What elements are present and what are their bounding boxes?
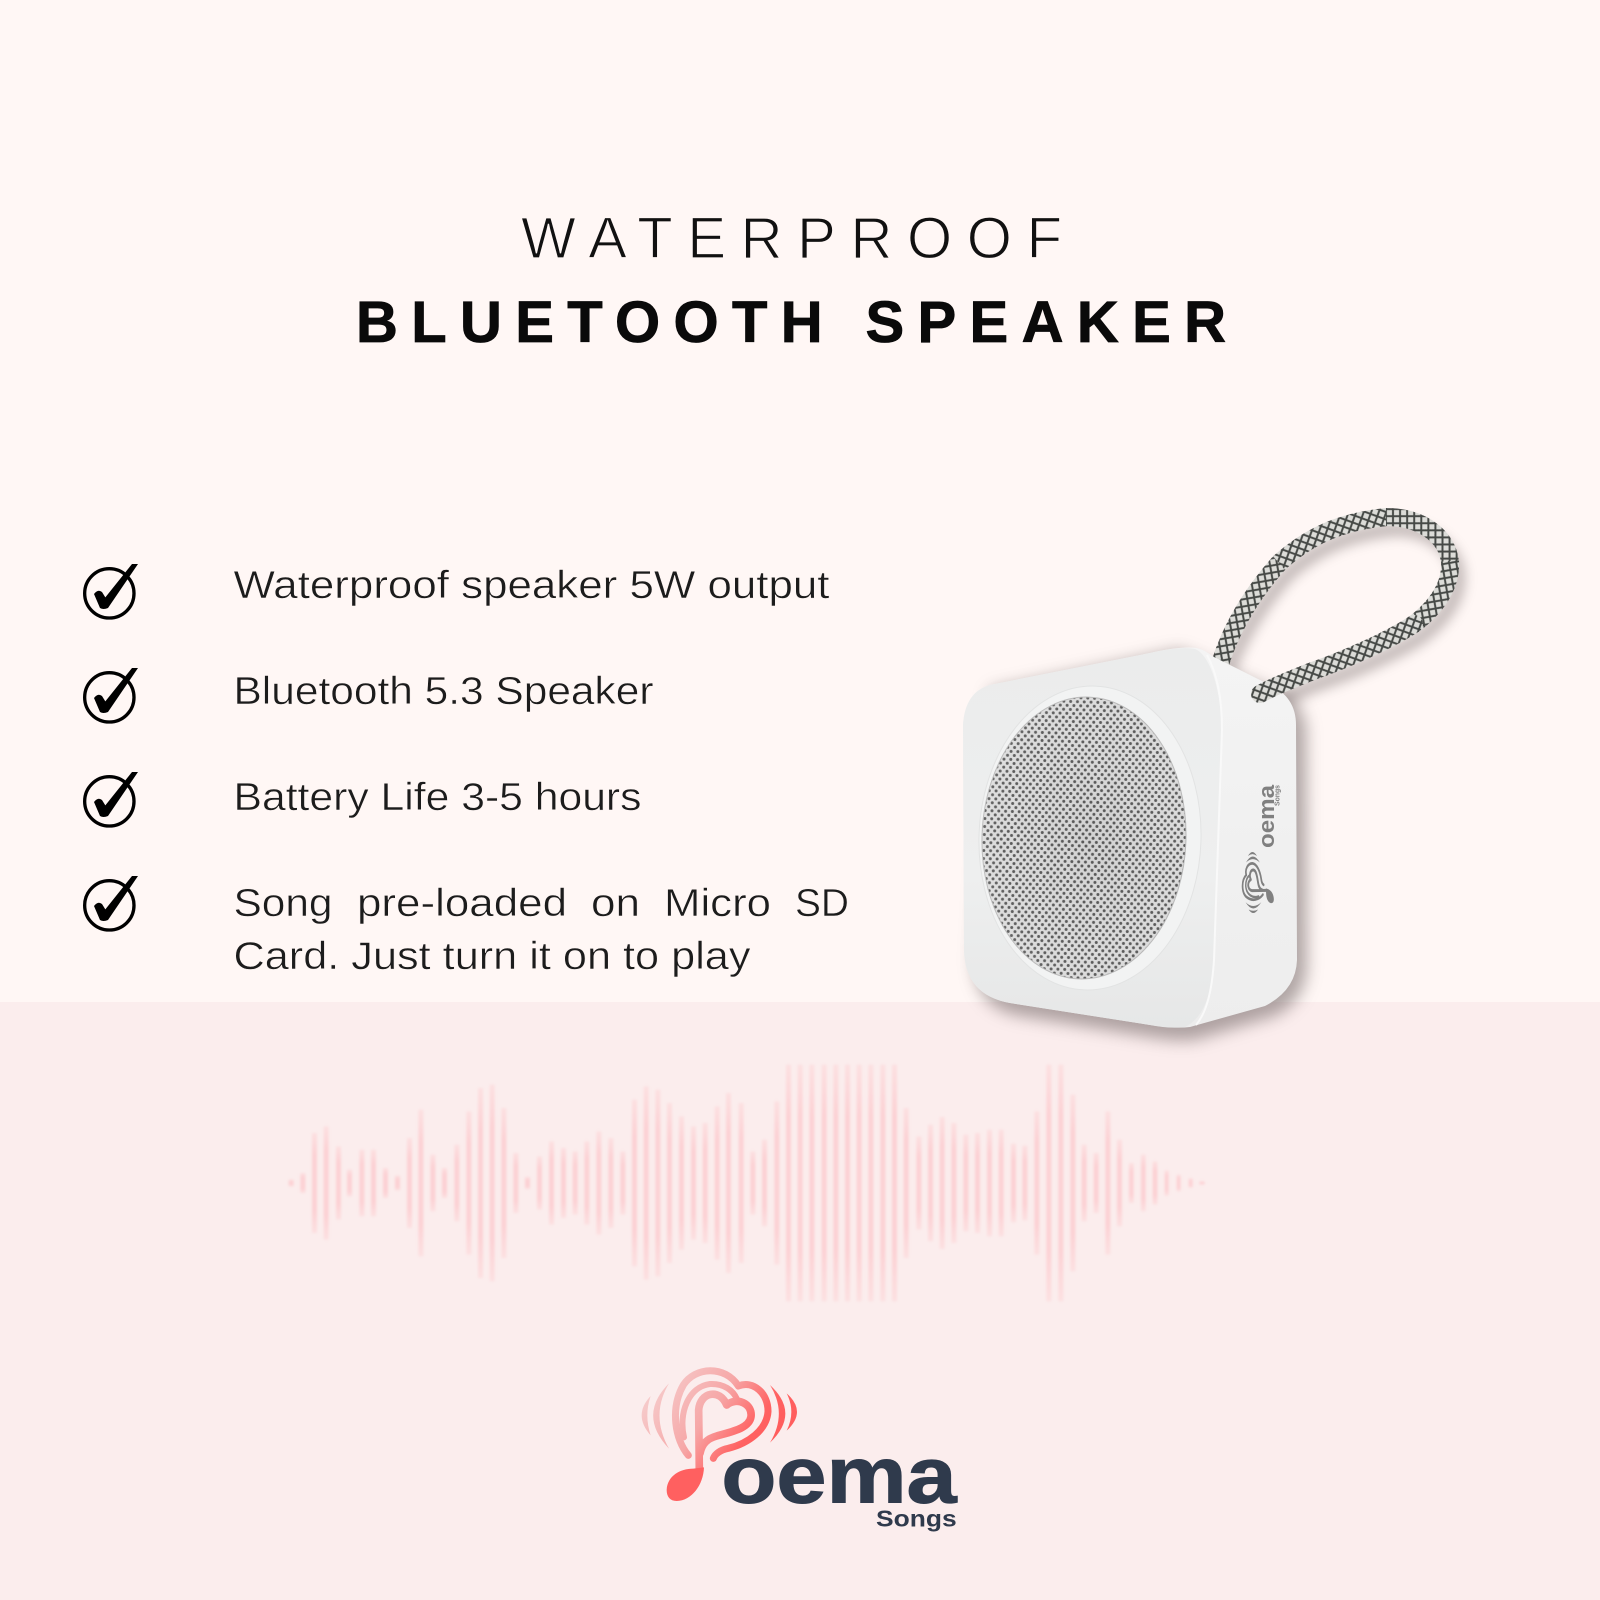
side logo songs: Songs	[1274, 785, 1282, 806]
title line: waterproof: WATERPROOF	[521, 206, 1062, 271]
feature text 2: Bluetooth 5.3 Speaker	[234, 670, 654, 713]
feature list	[85, 564, 849, 978]
logo	[642, 1371, 958, 1532]
logo mark	[642, 1371, 797, 1501]
feature text 4: pre-loaded	[357, 882, 567, 925]
feature text 4: on	[591, 882, 640, 925]
side logo mark	[1243, 852, 1274, 913]
speaker body	[963, 648, 1297, 1028]
feature row 4	[85, 876, 849, 978]
speaker shadow	[974, 650, 1307, 1041]
title	[356, 206, 1226, 355]
feature text 4: Song	[234, 882, 332, 925]
title line: bluetooth speaker: BLUETOOTH SPEAKER	[356, 290, 1226, 355]
waveform right half	[739, 1065, 1205, 1301]
feature text 4: Card. Just turn it on to play	[234, 935, 751, 978]
note head	[667, 1467, 704, 1501]
icon: check mark 3	[85, 772, 138, 826]
feature row 2	[85, 668, 654, 722]
logo word oema: oema	[721, 1430, 958, 1519]
speaker grille rim	[974, 682, 1206, 994]
speaker front face	[963, 648, 1222, 1028]
speaker side logo	[1243, 784, 1282, 913]
cord shadow	[1228, 529, 1458, 706]
heart and sound arcs	[675, 1371, 768, 1472]
background: lower panel	[0, 1002, 1600, 1600]
feature text 4: Micro	[664, 882, 771, 925]
sound waveform	[289, 1065, 1205, 1301]
side logo oema: oema	[1254, 784, 1279, 848]
feature text 1: Waterproof speaker 5W output	[234, 564, 830, 607]
feature text 4	[234, 882, 849, 978]
feature row 3	[85, 772, 641, 826]
icon: check mark 2	[85, 668, 138, 722]
icon: check mark 4	[85, 876, 138, 930]
speaker grille	[977, 694, 1191, 982]
feature text 3: Battery Life 3-5 hours	[234, 776, 642, 819]
feature text 4: SD	[795, 882, 849, 925]
logo word songs: Songs	[876, 1506, 957, 1532]
carrying cord	[1220, 517, 1450, 694]
background: upper panel	[0, 0, 1600, 1002]
speaker grille shading	[977, 694, 1191, 982]
speaker seam highlight	[1196, 655, 1222, 1025]
waveform left half	[289, 1085, 731, 1281]
sound waves	[642, 1383, 797, 1449]
feature row 1	[85, 564, 830, 618]
icon: check mark 1	[85, 564, 138, 618]
speaker product image	[963, 517, 1458, 1041]
cord front end	[1260, 671, 1313, 694]
